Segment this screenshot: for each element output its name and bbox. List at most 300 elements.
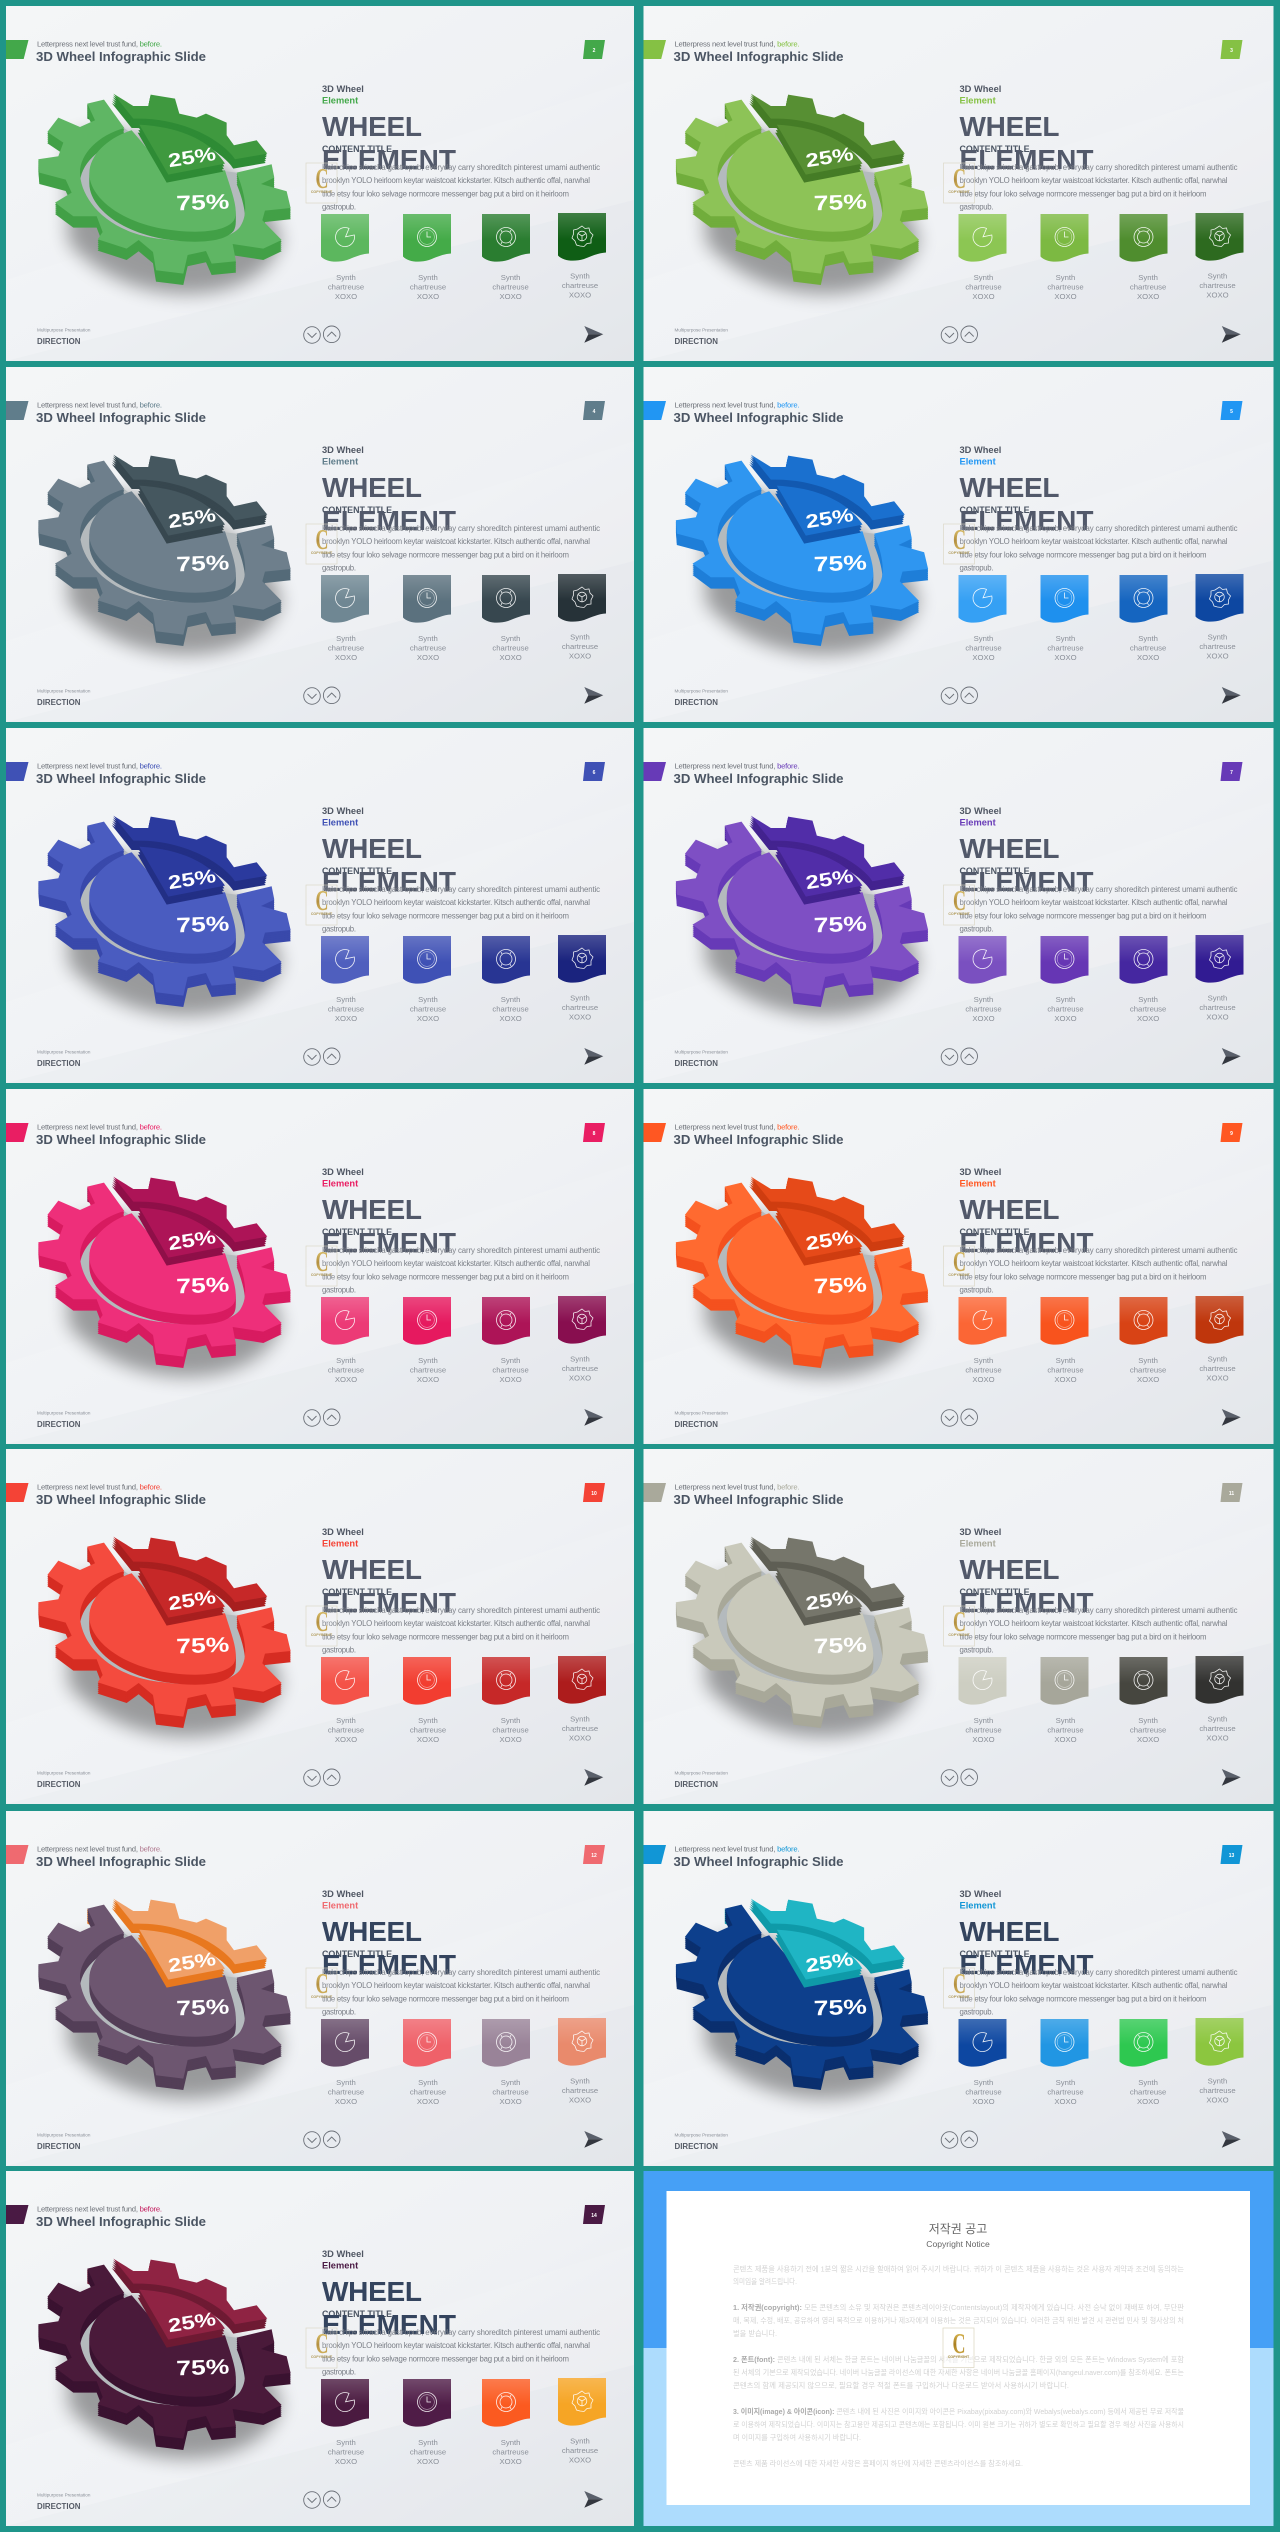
right heading: [960, 445, 1001, 466]
card 3: Synth: [501, 273, 520, 282]
nav buttons: [941, 326, 978, 343]
subtitle: Letterpress next level trust fund, before.: [37, 2204, 162, 2214]
blue upper background: [644, 2171, 1274, 2348]
label 75%: 75%: [176, 913, 230, 937]
footer label: DIRECTION: [37, 1059, 81, 1068]
body text: brooklyn YOLO heirloom keytar waistcoat kickstarter. Kitsch authentic offal, narwhal: [322, 537, 590, 546]
subtitle: Letterpress next level trust fund, before.: [37, 1482, 162, 1492]
card 4: Synth: [1208, 1355, 1227, 1364]
card 1: Synth: [974, 1356, 993, 1365]
card 3: Synth: [501, 634, 520, 643]
card 4: [558, 213, 606, 299]
label 25%: 25%: [804, 1949, 855, 1977]
label 75%: 75%: [813, 913, 868, 937]
big title WHEEL: WHEEL: [960, 1916, 1060, 1947]
right heading: Element: [960, 456, 996, 466]
card 1: XOXO: [335, 1014, 357, 1023]
slide background: [6, 1449, 634, 1804]
watermark logo: [306, 163, 337, 203]
gear 25% segment: [749, 94, 905, 183]
label 75%: 75%: [176, 1996, 230, 2020]
slide 7: purple wheel: [644, 728, 1274, 1083]
card 1: Synth: [336, 995, 356, 1004]
body text: gastropub.: [960, 1646, 994, 1654]
closing line: 콘텐츠 제품 라이선스에 대한 자세한 사항은 홈페이지 하단에 자세한 콘텐츠라이선스를 참조하세요.: [733, 2458, 1023, 2468]
card 2: XOXO: [1054, 2097, 1077, 2106]
arrow icon: [584, 687, 603, 704]
big title WHEEL: WHEEL: [960, 833, 1060, 864]
card 3: XOXO: [499, 1735, 522, 1744]
label 75%: 75%: [813, 191, 868, 215]
content title: CONTENT TITLE: [322, 2309, 392, 2319]
big title ELEMENT: ELEMENT: [960, 1949, 1094, 1980]
body text: tilde etsy four loko selvage normcore messenger bag put a bird on it heirloom: [322, 190, 569, 198]
arrow icon: [1222, 1769, 1241, 1786]
gear 75% segment: [38, 1905, 291, 2099]
body text: [960, 1968, 1238, 2016]
slide 2: green wheel: [6, 6, 634, 361]
big title ELEMENT: ELEMENT: [960, 866, 1094, 897]
body text: [322, 1968, 600, 2016]
card 2: [403, 1297, 451, 1384]
subtitle: Letterpress next level trust fund, before.: [674, 1482, 800, 1492]
body text: gastropub.: [322, 2368, 356, 2376]
subtitle: Letterpress next level trust fund, before.: [674, 1122, 800, 1132]
body text: tilde etsy four loko selvage normcore messenger bag put a bird on it heirloom: [960, 190, 1206, 198]
gear 75% segment: [676, 1905, 928, 2099]
nav buttons: [304, 687, 340, 704]
right heading: [322, 2249, 364, 2270]
card 1: Synth: [336, 2438, 356, 2447]
slide 14: burgundy wheel: [6, 2171, 634, 2526]
slide background: [6, 6, 634, 361]
card 2: XOXO: [417, 1014, 439, 1023]
white notice sheet: [666, 2191, 1250, 2505]
arrow icon: [584, 326, 603, 343]
body text: brooklyn YOLO heirloom keytar waistcoat kickstarter. Kitsch authentic offal, narwhal: [322, 1981, 590, 1990]
card 2: [403, 214, 451, 301]
page number badge: [1220, 401, 1242, 420]
card 1: [321, 214, 369, 301]
card 4: Synth: [570, 272, 590, 281]
card 3: chartreuse: [1130, 2088, 1166, 2097]
card 1: Synth: [974, 2078, 993, 2087]
right heading: [322, 1527, 364, 1548]
body text: Kale chips sriracha gastropub, everyday carry shoreditch pinterest umami authentic: [960, 885, 1238, 894]
slide title: 3D Wheel Infographic Slide: [674, 1492, 844, 1507]
subtitle: Letterpress next level trust fund, before.: [674, 400, 800, 410]
watermark logo: [944, 163, 974, 203]
page number badge: [583, 2205, 605, 2224]
watermark logo: [306, 1606, 337, 1646]
slide title: 3D Wheel Infographic Slide: [674, 1132, 844, 1147]
header ribbon: [644, 1123, 666, 1142]
slide background: [644, 728, 1274, 1083]
right heading: 3D Wheel: [322, 1527, 364, 1537]
card 1: chartreuse: [965, 283, 1002, 292]
gear 75% segment: [38, 461, 291, 655]
card 2: XOXO: [417, 292, 439, 301]
card 3: XOXO: [499, 2097, 522, 2106]
card 2: chartreuse: [1047, 1005, 1084, 1014]
card 3: chartreuse: [1130, 283, 1166, 292]
footer label: Multipurpose Presentation: [674, 1770, 728, 1776]
card 4: Synth: [570, 994, 590, 1003]
right heading: [322, 806, 364, 828]
header ribbon: [6, 762, 28, 781]
body text: tilde etsy four loko selvage normcore messenger bag put a bird on it heirloom: [322, 1994, 569, 2004]
nav buttons: [941, 1048, 978, 1065]
slide background: [6, 1811, 634, 2166]
right heading: 3D Wheel: [960, 1167, 1001, 1177]
card 3: [482, 936, 530, 1023]
card 4: XOXO: [569, 1733, 591, 1742]
gear 25% segment: [112, 2259, 267, 2348]
card 1: [958, 936, 1006, 1023]
right heading: Element: [322, 1538, 358, 1548]
card 1: Synth: [974, 995, 993, 1004]
watermark logo: COPYRIGHT: [311, 1633, 333, 1637]
watermark logo: C: [316, 525, 328, 556]
card 3: XOXO: [1137, 1014, 1159, 1023]
right heading: 3D Wheel: [322, 2249, 364, 2259]
page number badge: 3: [1230, 48, 1233, 54]
right heading: Element: [322, 1900, 358, 1910]
card 2: [403, 575, 451, 662]
body text: [960, 1246, 1238, 1294]
card 2: chartreuse: [1047, 644, 1084, 653]
card 3: [482, 1297, 530, 1384]
page number badge: [583, 401, 605, 420]
gear 25% segment: [749, 1537, 905, 1626]
footer label: Multipurpose Presentation: [674, 2132, 728, 2138]
card 2: XOXO: [1054, 292, 1077, 301]
arrow icon: [584, 2131, 603, 2148]
card 2: chartreuse: [410, 2448, 446, 2457]
big title ELEMENT: ELEMENT: [322, 144, 456, 175]
section 2: font: [733, 2354, 1184, 2390]
watermark logo: C: [316, 164, 328, 195]
subtitle: Letterpress next level trust fund, before.: [37, 1844, 162, 1854]
card 2: XOXO: [1054, 653, 1077, 662]
card 1: chartreuse: [965, 1005, 1002, 1014]
card 2: [403, 2019, 451, 2106]
card 2: XOXO: [417, 1375, 439, 1384]
watermark logo: COPYRIGHT: [311, 1273, 333, 1277]
slide background: [6, 2171, 634, 2526]
card 4: chartreuse: [1199, 281, 1236, 290]
body text: [322, 1246, 600, 1294]
card 1: chartreuse: [328, 644, 364, 653]
footer label: [37, 1050, 91, 1068]
header ribbon: [6, 2205, 28, 2224]
subtitle: Letterpress next level trust fund, before.: [37, 40, 162, 48]
card 2: [403, 2379, 451, 2466]
card 2: chartreuse: [410, 2088, 446, 2097]
watermark logo: C: [953, 1247, 966, 1278]
intro paragraph: [733, 2264, 1184, 2286]
page number badge: 2: [593, 48, 596, 54]
watermark logo: COPYRIGHT: [948, 190, 970, 194]
big title ELEMENT: ELEMENT: [322, 505, 456, 536]
watermark logo: COPYRIGHT: [311, 912, 333, 916]
content title: CONTENT TITLE: [322, 144, 392, 154]
right heading: [960, 1527, 1001, 1548]
watermark logo: C: [952, 2329, 966, 2360]
page number badge: 9: [1230, 1131, 1233, 1137]
nav buttons: [304, 326, 340, 343]
body text: gastropub.: [322, 564, 356, 572]
gear chart: [38, 455, 291, 655]
card 2: Synth: [418, 1356, 438, 1365]
slide title: 3D Wheel Infographic Slide: [36, 1132, 206, 1147]
notice title: 저작권 공고: [929, 2222, 987, 2236]
card 3: XOXO: [499, 653, 522, 662]
card 4: Synth: [570, 2437, 590, 2446]
right heading: 3D Wheel: [322, 445, 364, 455]
slide 6: indigo wheel: [6, 728, 634, 1083]
header ribbon: [6, 1123, 28, 1142]
gear 75% segment: [676, 461, 928, 655]
card 3: [1120, 214, 1168, 301]
right heading: 3D Wheel: [960, 1527, 1001, 1537]
arrow icon: [1222, 1409, 1241, 1426]
watermark logo: COPYRIGHT: [948, 2355, 970, 2359]
watermark logo: C: [953, 164, 966, 195]
card 2: Synth: [418, 2078, 438, 2087]
watermark logo: [306, 2328, 337, 2368]
card 1: [321, 1657, 369, 1744]
card 1: XOXO: [972, 1735, 995, 1744]
card 2: XOXO: [417, 2457, 439, 2466]
card 4: XOXO: [1206, 1373, 1229, 1382]
big title ELEMENT: ELEMENT: [322, 1949, 456, 1980]
gear 25% segment: [112, 1899, 267, 1988]
footer label: [674, 1050, 728, 1068]
card 2: chartreuse: [410, 1366, 446, 1375]
section 1: copyright: [733, 2302, 1184, 2338]
card 1: chartreuse: [328, 1726, 364, 1735]
slide 3: light green wheel: [644, 6, 1274, 361]
subtitle: Letterpress next level trust fund, before.: [674, 1844, 800, 1854]
right heading: [322, 84, 364, 106]
footer label: DIRECTION: [37, 2142, 81, 2151]
right heading: Element: [322, 456, 358, 466]
card 2: XOXO: [1054, 1735, 1077, 1744]
card 2: chartreuse: [410, 644, 446, 653]
slide title: 3D Wheel Infographic Slide: [36, 2214, 206, 2229]
body text: gastropub.: [960, 2008, 994, 2016]
body text: tilde etsy four loko selvage normcore messenger bag put a bird on it heirloom: [322, 1632, 569, 1642]
slide background: [644, 6, 1274, 361]
card 1: [321, 2019, 369, 2106]
slide title: 3D Wheel Infographic Slide: [36, 49, 206, 64]
watermark logo: COPYRIGHT: [948, 1273, 970, 1277]
card 1: XOXO: [335, 2097, 357, 2106]
page number badge: 6: [593, 770, 596, 776]
footer label: [674, 1770, 728, 1789]
card 4: chartreuse: [562, 1724, 598, 1733]
card 2: Synth: [1056, 1356, 1075, 1365]
card 4: Synth: [1208, 1715, 1227, 1724]
body text: [960, 524, 1238, 572]
card 3: chartreuse: [1130, 644, 1166, 653]
footer label: DIRECTION: [37, 698, 81, 707]
footer label: DIRECTION: [674, 1059, 718, 1068]
card 1: Synth: [336, 634, 356, 643]
gear 25% segment: [112, 94, 267, 183]
slide title: 3D Wheel Infographic Slide: [36, 410, 206, 425]
slide background: [644, 367, 1274, 722]
card 1: XOXO: [335, 653, 357, 662]
gear 75% segment: [38, 1183, 291, 1377]
card 1: [321, 575, 369, 662]
card 3: chartreuse: [1130, 1726, 1166, 1735]
card 1: chartreuse: [328, 2448, 364, 2457]
card 1: chartreuse: [328, 283, 364, 292]
gear 75% segment: [676, 822, 928, 1016]
right heading: Element: [322, 1178, 358, 1188]
big title ELEMENT: ELEMENT: [322, 1227, 456, 1258]
footer label: [37, 1770, 91, 1789]
content title: CONTENT TITLE: [960, 1587, 1030, 1597]
slide 8: pink wheel: [6, 1089, 634, 1444]
card 2: XOXO: [1054, 1375, 1077, 1384]
page number badge: 8: [593, 1131, 596, 1137]
big title WHEEL: WHEEL: [322, 1554, 422, 1585]
card 2: chartreuse: [1047, 1726, 1084, 1735]
footer label: Multipurpose Presentation: [37, 688, 91, 694]
body text: tilde etsy four loko selvage normcore messenger bag put a bird on it heirloom: [960, 1272, 1206, 1282]
big title ELEMENT: ELEMENT: [960, 1227, 1094, 1258]
card 2: Synth: [1056, 2078, 1075, 2087]
footer label: [37, 328, 91, 346]
gear chart: [38, 2259, 291, 2459]
card 1: chartreuse: [965, 644, 1002, 653]
slide 13: navy and teal wheel: [644, 1811, 1274, 2166]
gear 25% segment: [749, 1177, 905, 1266]
card 3: chartreuse: [492, 1005, 529, 1014]
card 3: [482, 214, 530, 301]
card 2: Synth: [418, 995, 438, 1004]
card 4: Synth: [570, 633, 590, 642]
card 1: [321, 1297, 369, 1384]
right heading: Element: [322, 96, 358, 106]
card 2: [1040, 1297, 1088, 1384]
body text: brooklyn YOLO heirloom keytar waistcoat kickstarter. Kitsch authentic offal, narwhal: [960, 537, 1228, 546]
section 1: copyright: 1. 저작권(copyright): 모든 콘텐츠의 소유 및 저작권은 콘텐츠레이아웃(Contentslayout)의 제작자에게 있습니다. 사전 승낙 없이 재배포 하여, 무단판: [733, 2302, 1184, 2312]
card 4: [1196, 1296, 1244, 1382]
right heading: [322, 1167, 364, 1188]
card 2: XOXO: [417, 2097, 439, 2106]
label 25%: 25%: [167, 505, 218, 533]
card 3: XOXO: [499, 1014, 522, 1023]
content title: CONTENT TITLE: [322, 505, 392, 515]
watermark logo: [944, 1246, 974, 1286]
card 3: [482, 575, 530, 662]
label 75%: 75%: [813, 1634, 868, 1658]
footer label: Multipurpose Presentation: [37, 1050, 91, 1054]
card 1: chartreuse: [328, 2088, 364, 2097]
card 4: Synth: [570, 2077, 590, 2086]
content title: CONTENT TITLE: [322, 1949, 392, 1959]
big title WHEEL: WHEEL: [322, 833, 422, 864]
arrow icon: [1222, 326, 1241, 343]
footer label: Multipurpose Presentation: [674, 1410, 728, 1416]
card 1: [958, 575, 1006, 662]
panel: copyright notice: [644, 2171, 1274, 2526]
body text: brooklyn YOLO heirloom keytar waistcoat kickstarter. Kitsch authentic offal, narwhal: [960, 1259, 1228, 1268]
nav buttons: [304, 1048, 340, 1065]
header ribbon: [6, 40, 28, 59]
section 3: image and icon: 3. 이미지(image) & 아이콘(icon): 콘텐츠 내에 된 사진은 이미지와 아이콘은 Pixabay(pixabay.com)와 Webalys(webalys.com) 등에서 제공된 무료 저작물: [733, 2406, 1184, 2416]
body text: [960, 1606, 1238, 1654]
footer label: DIRECTION: [674, 1420, 718, 1429]
watermark logo: [306, 1246, 337, 1286]
body text: brooklyn YOLO heirloom keytar waistcoat kickstarter. Kitsch authentic offal, narwhal: [322, 176, 590, 185]
gear chart: [676, 816, 928, 1016]
subtitle: Letterpress next level trust fund, before.: [37, 400, 162, 410]
gear chart: [38, 1177, 291, 1377]
watermark logo: C: [953, 886, 966, 917]
slide title: 3D Wheel Infographic Slide: [674, 771, 844, 786]
right heading: 3D Wheel: [322, 1167, 364, 1177]
intro paragraph: 콘텐츠 제품을 사용하기 전에 1분의 짧은 시간을 할애하여 읽어 주시기 바랍니다. 귀하가 이 콘텐츠 제품을 사용하는 것은 사용자 계약과 조건에 동의하는: [733, 2264, 1184, 2274]
light blue lower background: [644, 2348, 1274, 2526]
header ribbon: [644, 1483, 666, 1502]
watermark logo: [944, 1606, 974, 1646]
footer label: [674, 1410, 728, 1429]
card 3: Synth: [1138, 1716, 1158, 1725]
right heading: Element: [960, 1538, 996, 1548]
card 4: [558, 2018, 606, 2104]
card 1: chartreuse: [328, 1005, 364, 1014]
card 1: [321, 936, 369, 1023]
header ribbon: [6, 401, 28, 420]
card 2: Synth: [1056, 273, 1075, 282]
card 1: XOXO: [335, 292, 357, 301]
gear 75% segment: [676, 1543, 928, 1737]
body text: gastropub.: [322, 924, 356, 934]
card 3: chartreuse: [1130, 1366, 1166, 1375]
card 4: chartreuse: [1199, 1364, 1236, 1373]
page number badge: 7: [1230, 770, 1233, 776]
watermark logo: COPYRIGHT: [948, 551, 970, 555]
body text: tilde etsy four loko selvage normcore messenger bag put a bird on it heirloom: [960, 912, 1206, 920]
watermark logo: [944, 1968, 974, 2008]
card 4: [558, 1656, 606, 1742]
card 3: Synth: [501, 2078, 520, 2087]
card 1: [958, 1657, 1006, 1744]
right heading: 3D Wheel: [960, 1889, 1001, 1899]
card 3: chartreuse: [492, 2088, 529, 2097]
intro paragraph: 의미임을 알려드립니다.: [733, 2276, 797, 2286]
slide background: [644, 1089, 1274, 1444]
body text: tilde etsy four loko selvage normcore messenger bag put a bird on it heirloom: [960, 1994, 1206, 2004]
body text: tilde etsy four loko selvage normcore messenger bag put a bird on it heirloom: [960, 1632, 1206, 1642]
right heading: Element: [322, 818, 358, 828]
card 2: XOXO: [417, 1735, 439, 1744]
page number badge: [583, 40, 605, 59]
card 4: chartreuse: [1199, 1003, 1236, 1012]
nav buttons: [941, 1769, 978, 1786]
right heading: Element: [322, 2260, 358, 2270]
page number badge: [1220, 762, 1242, 781]
card 3: chartreuse: [1130, 1005, 1166, 1014]
body text: Kale chips sriracha gastropub, everyday carry shoreditch pinterest umami authentic: [960, 524, 1238, 533]
card 1: XOXO: [972, 653, 995, 662]
label 25%: 25%: [167, 1227, 218, 1255]
